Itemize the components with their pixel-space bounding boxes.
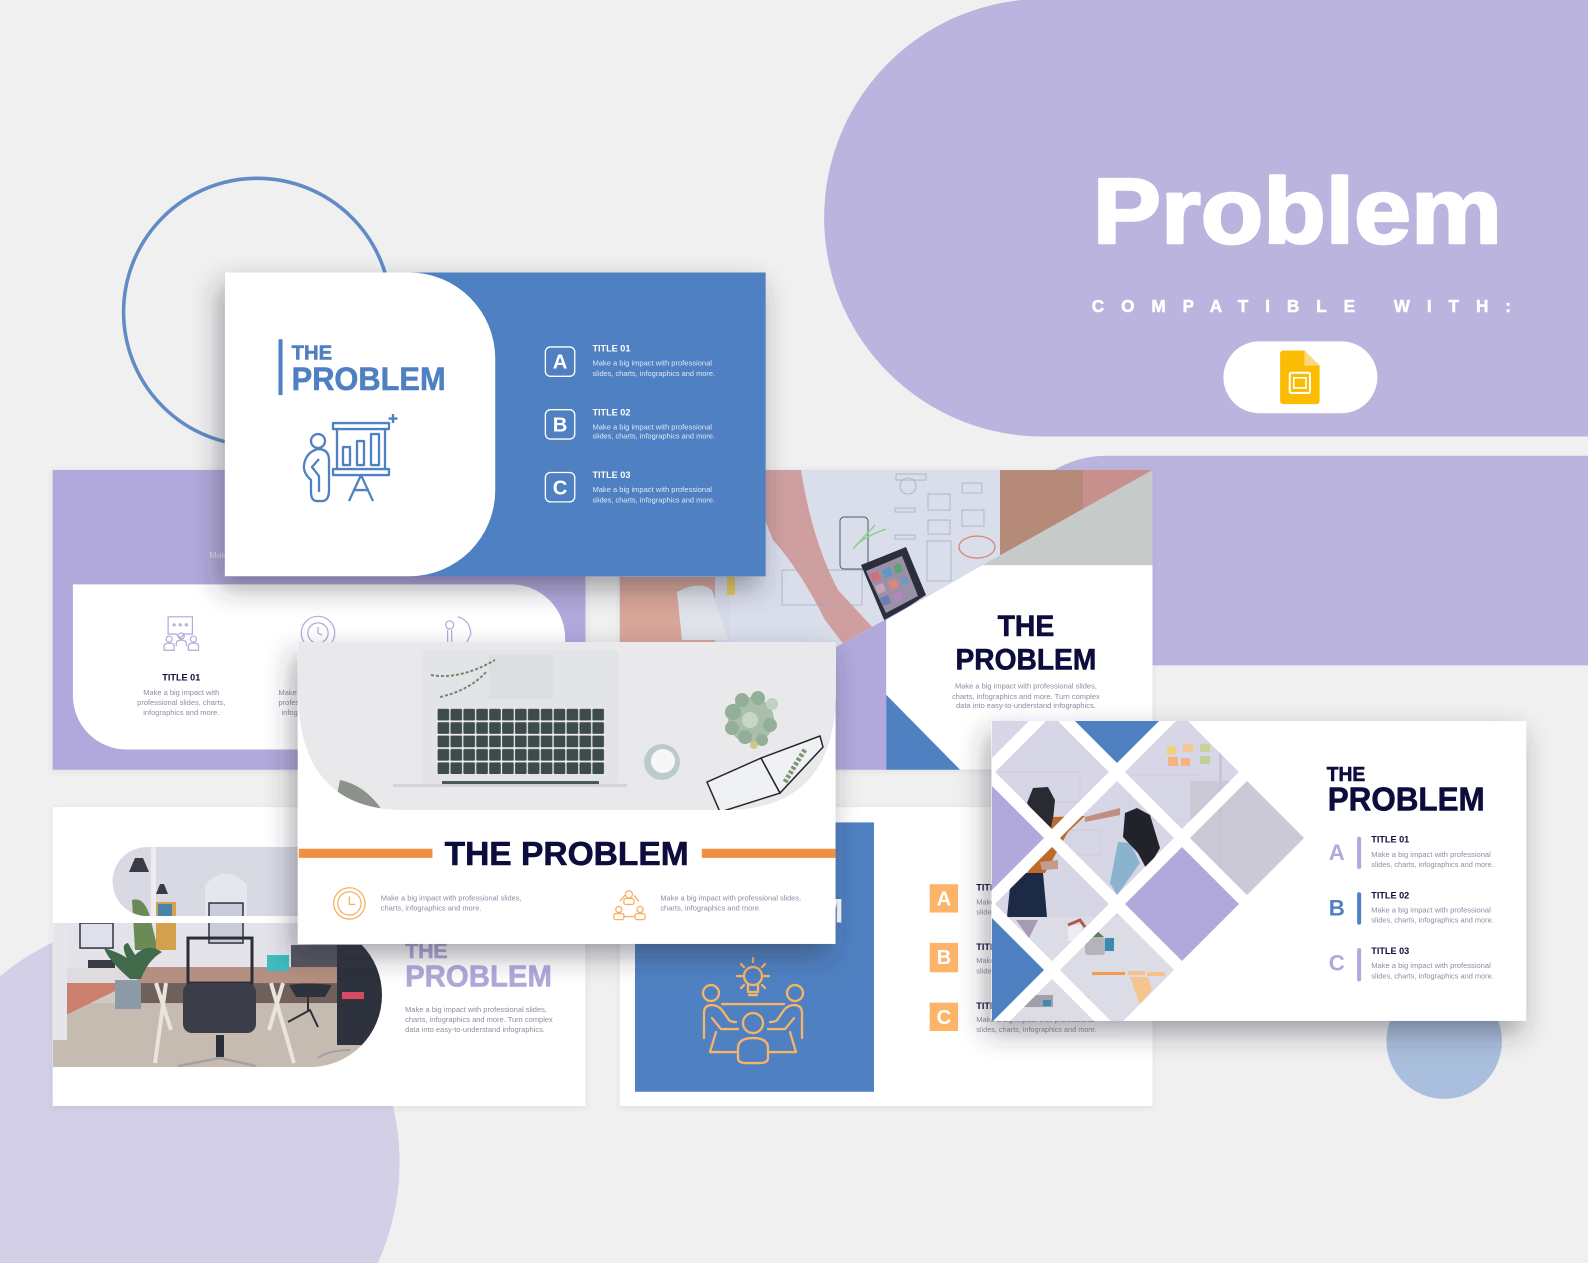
heading: the problem (279, 339, 446, 397)
text: first description: Make a big impact with professional slides, (381, 893, 522, 902)
photo: laptop on desk (298, 642, 838, 812)
white rounded card (225, 272, 495, 576)
photo: office (50, 840, 393, 1070)
item C (1329, 946, 1494, 981)
text: title 02 column: Make a big impact (279, 688, 340, 697)
background circle: small blue (1386, 983, 1502, 1099)
text: second description (660, 893, 801, 913)
item C: slides, charts, infographics and more. (1371, 971, 1494, 980)
heading: the problem (405, 939, 552, 993)
heading: problem on blue: PROBLEM (672, 893, 844, 931)
item A (1329, 835, 1494, 869)
subheading: compatible with: COMPATIBLE WITH: (1092, 296, 1511, 316)
item A: slides, charts, infographics and more. (592, 369, 715, 378)
item C: slides, charts, infographics and more. (592, 495, 715, 504)
diamond: purple left (992, 786, 1044, 890)
item B: slides, charts (976, 966, 1020, 975)
icon: team meeting with lightbulb (703, 958, 803, 1063)
text: title 01 column: Make a big impact with (143, 688, 219, 697)
panel: purple slide with three icons: Make a big impact (210, 550, 280, 560)
diamond: purple centre (1125, 847, 1239, 961)
item C: TITLE 03 (976, 1001, 1014, 1011)
item C: slides, charts, infographics and more. (976, 1025, 1097, 1034)
grey triangle (982, 470, 1153, 565)
text: title 01 column (137, 673, 225, 717)
diamond: blue top (1075, 721, 1159, 763)
icon: three people (614, 891, 645, 920)
item C: Make a big impact with professional (592, 485, 712, 494)
item B: slides, charts, infographics and more. (592, 432, 715, 441)
background circle: bottom left lilac (0, 919, 400, 1263)
item A: A (1329, 840, 1345, 865)
item A: A (553, 352, 568, 374)
icon: presenter with chart (304, 414, 397, 501)
text: title 01 column: professional slides, charts, (137, 698, 225, 707)
panel: blue slide with ABC list (225, 272, 766, 576)
item B: slides, charts, infographics and more. (1371, 916, 1494, 925)
heading: the problem: PROBLEM (956, 643, 1096, 676)
panel: purple slide with three icons (53, 470, 585, 770)
text: description: Make a big impact with professional slides, (405, 1005, 547, 1014)
text: title 01 column: infographics and more. (143, 708, 219, 717)
photo: hands, wireframes and phone (620, 470, 1160, 650)
text: description (952, 682, 1100, 710)
heading: the problem: THE (1327, 764, 1365, 786)
item A: TITLE 01 (976, 882, 1014, 892)
item B (545, 407, 715, 441)
background blob: top purple pill (824, 0, 1588, 437)
text: first description (381, 893, 522, 913)
heading: the problem: PROBLEM (1328, 781, 1485, 818)
blue triangle (886, 695, 960, 770)
item C (545, 470, 715, 504)
item A: Make a big impact with professional (1371, 850, 1491, 859)
item C: TITLE 03 (592, 470, 630, 480)
diamond: blue lower left (992, 918, 1044, 1021)
background circle: outline blue (124, 178, 391, 446)
text: description (405, 1005, 553, 1034)
heading: the problem: THE PROBLEM (445, 836, 689, 873)
item B: TITLE 02 (592, 407, 630, 417)
item B: B (1329, 896, 1345, 921)
item C: TITLE 03 (1371, 946, 1409, 956)
item B: B (937, 947, 951, 969)
item A (545, 343, 715, 378)
item A: Make a big impact (976, 897, 1038, 906)
heading: the problem (956, 610, 1096, 676)
text: title 02 column (279, 688, 340, 717)
background blob: middle purple pill (1002, 456, 1588, 665)
text: description: Make a big impact with professional slides, (955, 682, 1097, 691)
orange rule right (702, 849, 836, 858)
item B: Make a big impact with professional (1371, 906, 1491, 915)
icon: team chat (164, 617, 198, 650)
item A: A (937, 888, 952, 910)
item A: Make a big impact with professional (592, 359, 712, 368)
diamond mosaic (992, 721, 1304, 1021)
item B: TITLE 02 (976, 942, 1014, 952)
white text panel (886, 565, 1153, 770)
item C: Make a big impact with professional (1371, 961, 1491, 970)
heading: the problem: THE (292, 343, 332, 365)
heading: the problem: PROBLEM (405, 959, 552, 993)
panel: office photo slide (50, 807, 585, 1106)
text: second description: Make a big impact with professional slides, (660, 893, 801, 902)
panel: centre slide with laptop photo (298, 642, 838, 944)
item A: slides, charts, infographics and more. (1371, 860, 1494, 869)
item B: Make a big impact (976, 956, 1038, 965)
item B: TITLE 02 (1371, 890, 1409, 900)
badge: Google Slides (1223, 341, 1377, 413)
text: first description: charts, infographics and more. (381, 904, 481, 913)
white card (73, 584, 565, 749)
item B (1329, 890, 1494, 925)
panel: diamond mosaic slide (968, 715, 1538, 1051)
heading: Problem: Problem (1093, 159, 1502, 263)
icon: slides file (1280, 350, 1320, 404)
item C (930, 1001, 1097, 1034)
panel: photo slide with triangles (620, 470, 1160, 770)
item C: C (553, 477, 568, 499)
heading: the problem: THE (405, 939, 448, 963)
text: title 02 column: professional slides (279, 698, 340, 707)
heading: the problem (1327, 764, 1485, 818)
item C: C (937, 1007, 952, 1029)
heading: the problem: THE (998, 610, 1054, 643)
item B: B (553, 414, 567, 436)
icon: head with bulb (446, 617, 471, 642)
photo: women at whiteboard (992, 721, 1304, 1021)
item B (930, 942, 1038, 975)
text: description: data into easy-to-understand infographics. (956, 701, 1096, 710)
panel: blue block slide with ABC list (620, 807, 1153, 1106)
blue block (635, 822, 874, 1092)
item C: C (1329, 950, 1345, 975)
text: description: charts, infographics and more. Turn complex (405, 1015, 553, 1024)
heading: the problem: PROBLEM (292, 361, 446, 397)
item A: slides, charts (976, 908, 1020, 917)
icon: clock (334, 888, 365, 919)
orange rule left (299, 849, 432, 858)
text: title 01 column: TITLE 01 (162, 673, 200, 683)
item B: Make a big impact with professional (592, 422, 712, 431)
item A: TITLE 01 (1371, 835, 1409, 845)
text: description: charts, infographics and more. Turn complex (952, 692, 1100, 701)
item A (930, 882, 1038, 917)
item A: TITLE 01 (592, 343, 630, 353)
item C: Make a big impact with professional (976, 1015, 1095, 1024)
text: description: data into easy-to-understand infographics. (405, 1025, 545, 1034)
text: second description: charts, infographics and more. (660, 904, 761, 913)
icon: clock gear (301, 616, 335, 650)
text: title 02 column: infographics (282, 708, 322, 717)
